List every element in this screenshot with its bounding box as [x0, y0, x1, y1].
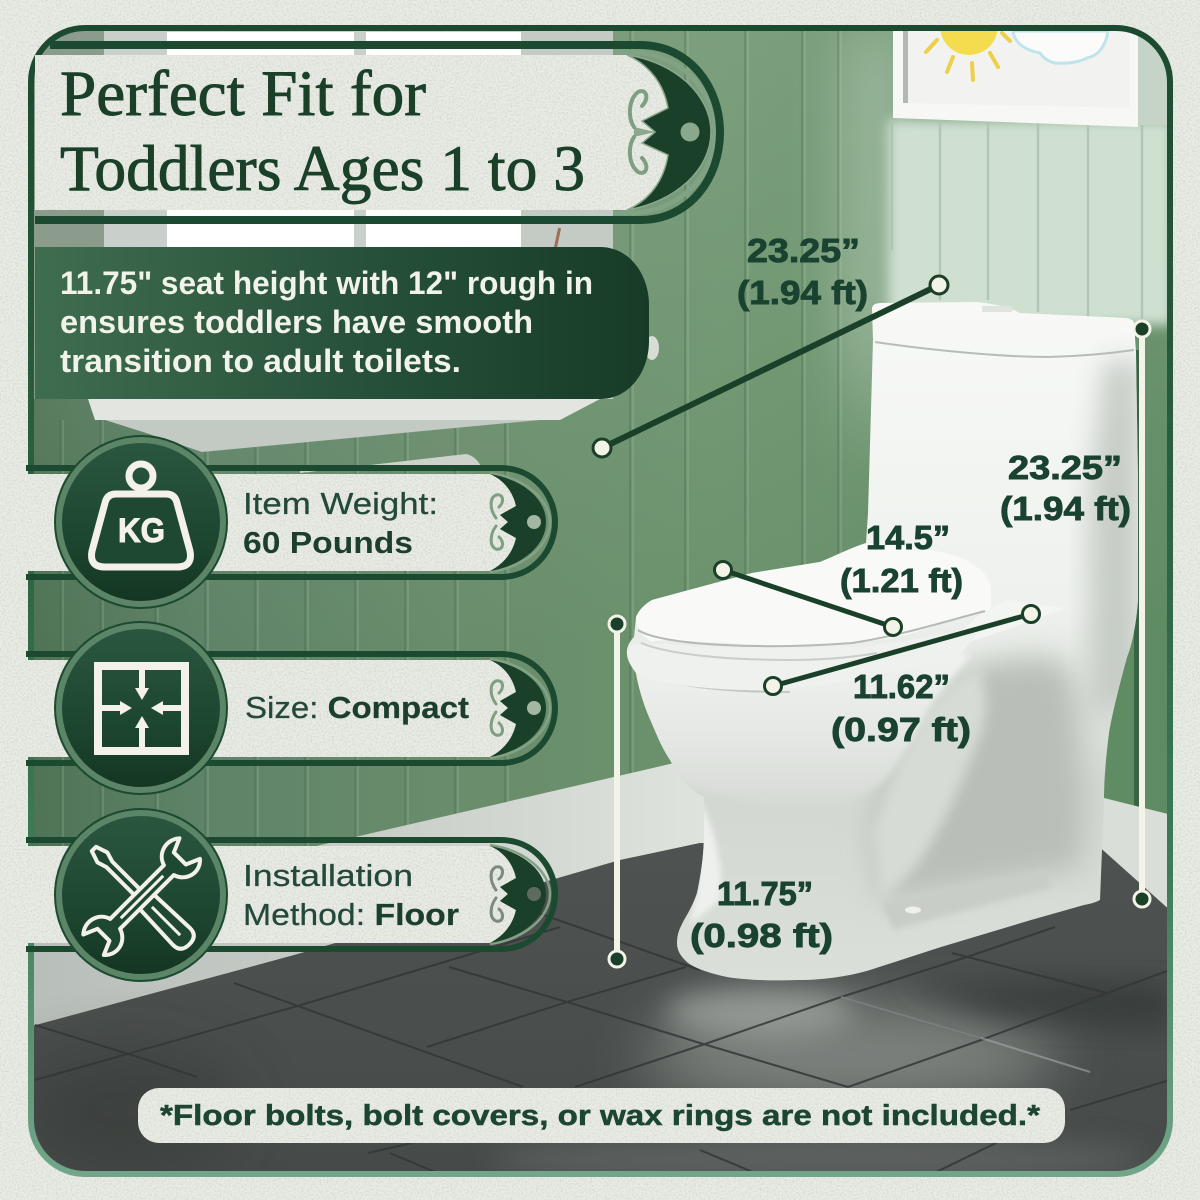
dimension: seat height line [609, 616, 625, 967]
panel: seat height description: transition to adult toilets. [60, 343, 461, 379]
label: tank depth [737, 232, 868, 311]
feature: installation method: Method: Floor [243, 897, 459, 932]
crescent ornament [627, 55, 711, 210]
feature: size: Size: Compact [245, 690, 469, 725]
body shading [622, 360, 1140, 930]
icon: kg weight [54, 435, 228, 609]
toilet body [627, 302, 1138, 980]
label: bowl width [831, 668, 971, 748]
label: seat height: (0.98 ft) [690, 917, 833, 954]
label: total height: (1.94 ft) [1000, 490, 1131, 527]
seat lid [636, 543, 991, 645]
footnote callout [138, 1088, 1065, 1143]
label: seat height: 11.75” [717, 875, 813, 912]
label: seat length: (1.21 ft) [840, 562, 963, 599]
icon: crossed tools [54, 808, 228, 982]
bowl rim [626, 646, 966, 690]
dimension: tank depth line [593, 276, 948, 457]
label: bowl width: 11.62” [853, 668, 950, 705]
feature: size [20, 621, 555, 795]
title text: Perfect Fit for [60, 58, 426, 130]
wall art in frame [893, 31, 1167, 127]
dimension: seat length line [714, 562, 902, 636]
rear ledge [965, 626, 1017, 641]
feature: item weight [20, 435, 555, 609]
label: tank depth: (1.94 ft) [737, 274, 868, 311]
feature: installation method: Installation [243, 858, 413, 893]
wall shadow beside tank [1134, 350, 1139, 807]
window behind the banners [32, 28, 659, 473]
title text: Toddlers Ages 1 to 3 [60, 133, 585, 205]
green beadboard wall [32, 28, 1173, 950]
panel: seat height description [35, 247, 649, 399]
label: seat length: 14.5” [866, 519, 950, 556]
footnote callout: *Floor bolts, bolt covers, or wax rings are not included.* [160, 1100, 1041, 1132]
tank lid [875, 342, 1134, 357]
bowl [627, 646, 967, 791]
dimension: total height line [1134, 321, 1150, 907]
panel: seat height description: ensures toddlers have smooth [60, 304, 533, 340]
label: seat height [690, 875, 833, 954]
icon: kg weight: KG [118, 512, 165, 550]
feature: installation method [20, 808, 555, 982]
label: tank depth: 23.25” [747, 232, 860, 269]
baseboard [32, 757, 1172, 1026]
dimension: bowl width line [764, 606, 1040, 694]
label: seat length [840, 519, 963, 599]
feature: item weight: Item Weight: [243, 486, 438, 521]
toilet [622, 302, 1140, 980]
label: bowl width: (0.97 ft) [831, 711, 971, 748]
dark tile floor [20, 843, 1172, 1184]
feature: item weight: 60 Pounds [243, 525, 413, 560]
label: total height [1000, 449, 1131, 527]
label: total height: 23.25” [1008, 449, 1122, 486]
banner: title [30, 45, 720, 220]
icon: compact size [54, 621, 228, 795]
panel: seat height description: 11.75" seat height with 12" rough in [60, 265, 593, 301]
title text [60, 58, 585, 205]
